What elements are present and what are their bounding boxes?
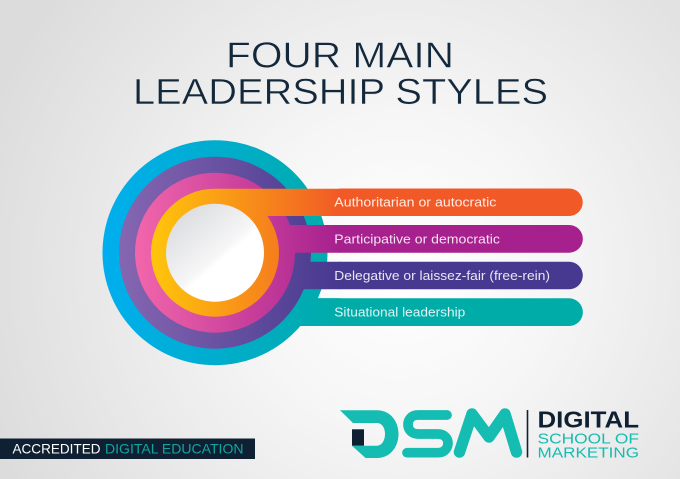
accreditation ribbon: ACCREDITED — [12, 440, 100, 456]
concentric ring diagram with bars — [102, 140, 583, 365]
logo letter M — [460, 414, 516, 452]
logo wordmark: SCHOOL OF — [538, 431, 639, 447]
title: LEADERSHIP STYLES — [133, 71, 548, 112]
title — [133, 35, 548, 112]
logo wordmark: MARKETING — [538, 445, 639, 461]
white centre circle — [166, 204, 264, 302]
logo letter D — [340, 410, 398, 458]
ring and bar: participative — [135, 173, 583, 333]
bar labels: Situational leadership — [334, 305, 465, 320]
title: FOUR MAIN — [226, 35, 454, 76]
bar labels: Delegative or laissez-fair (free-rein) — [334, 268, 550, 283]
logo divider — [527, 410, 528, 458]
ring and bar: delegative — [119, 157, 583, 349]
logo D square — [352, 429, 364, 446]
DSM logo — [340, 406, 639, 461]
bar labels — [334, 195, 550, 320]
bar labels: Participative or democratic — [334, 231, 500, 246]
bar labels: Authoritarian or autocratic — [334, 195, 497, 210]
accreditation ribbon — [0, 438, 255, 459]
ring and bar: authoritarian — [151, 188, 583, 317]
logo letter S — [407, 415, 448, 453]
ring and bar: situational leadership — [102, 140, 583, 365]
accreditation ribbon: DIGITAL EDUCATION — [105, 440, 244, 456]
logo wordmark — [538, 406, 639, 461]
logo wordmark: DIGITAL — [538, 406, 639, 432]
